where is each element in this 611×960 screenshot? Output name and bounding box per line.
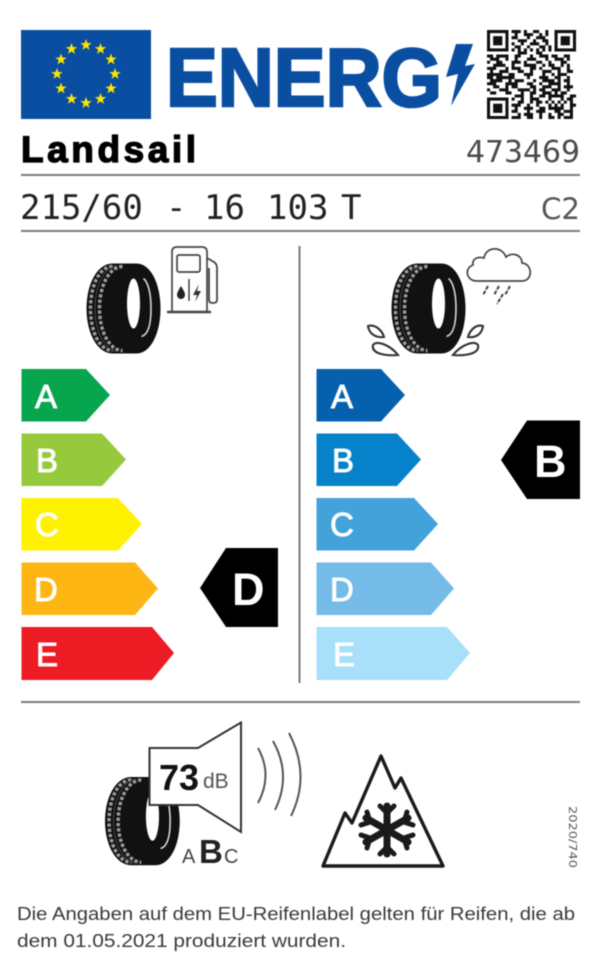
icon: speaker with noise value: 73 xyxy=(159,757,199,798)
class E arrow xyxy=(22,627,174,680)
footer note: dem 01.05.2021 produziert wurden. xyxy=(17,930,346,951)
class A arrow xyxy=(316,369,405,422)
tyre size: 215/60 xyxy=(20,188,143,228)
class B arrow xyxy=(316,434,421,486)
ENERG wordmark: ENERG xyxy=(166,31,442,124)
wet grip scale xyxy=(316,369,470,680)
footer note xyxy=(17,903,575,951)
icon: speaker with noise value xyxy=(150,722,241,832)
class A arrow: A xyxy=(331,378,353,415)
icon: speaker with noise value: dB xyxy=(203,770,229,793)
tyre size: 103 xyxy=(267,188,328,228)
icon: energy bolt xyxy=(446,44,475,106)
class D arrow: D xyxy=(330,571,354,608)
class B arrow: B xyxy=(36,442,58,479)
article number: 473469 xyxy=(466,135,580,170)
class C arrow xyxy=(22,498,142,550)
icon: fuel efficiency tyre xyxy=(86,264,160,354)
class A arrow xyxy=(22,369,110,422)
class C arrow xyxy=(316,498,438,550)
icon: three peak mountain snowflake xyxy=(323,756,443,866)
fuel rating badge D: D xyxy=(232,564,264,615)
regulation reference: 2020/740 xyxy=(566,806,579,868)
icon: water splashes xyxy=(368,326,483,355)
noise class ABC xyxy=(182,833,238,870)
class E arrow: E xyxy=(36,636,58,673)
footer note: Die Angaben auf dem EU-Reifenlabel gelten für Reifen, die ab xyxy=(17,903,575,924)
icon: sound waves xyxy=(258,733,301,816)
class D arrow: D xyxy=(34,571,58,608)
tyre class: C2 xyxy=(541,192,580,226)
class E arrow xyxy=(316,627,470,680)
tyre size: - xyxy=(166,188,186,228)
QR code xyxy=(487,30,576,119)
class C arrow: C xyxy=(35,506,59,543)
icon: noise tyre xyxy=(105,777,180,865)
brand name: Landsail xyxy=(21,129,196,170)
wet grip rating badge B: B xyxy=(534,436,566,487)
noise class ABC: B xyxy=(199,833,223,870)
class B arrow xyxy=(22,434,126,486)
tyre size: T xyxy=(341,188,361,228)
fuel efficiency scale xyxy=(22,369,174,680)
class B arrow: B xyxy=(332,442,354,479)
noise class ABC: C xyxy=(224,846,238,868)
wet grip rating badge B xyxy=(501,420,580,499)
noise class ABC: A xyxy=(182,846,196,868)
EU flag xyxy=(21,30,151,119)
icon: fuel pump xyxy=(167,247,217,312)
class D arrow xyxy=(316,562,454,615)
class C arrow: C xyxy=(330,506,354,543)
class D arrow xyxy=(22,562,158,615)
tyre size: 16 xyxy=(204,188,245,228)
icon: wet grip tyre xyxy=(392,264,466,354)
class A arrow: A xyxy=(35,378,57,415)
fuel rating badge D xyxy=(200,548,278,627)
class E arrow: E xyxy=(333,636,355,673)
icon: rain cloud xyxy=(467,249,530,304)
